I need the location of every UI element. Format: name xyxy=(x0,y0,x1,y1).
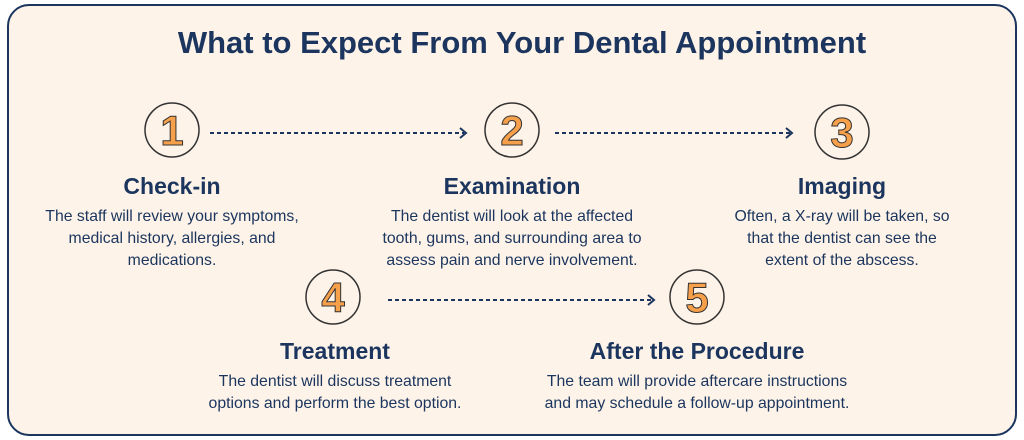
arrow 4 to 5 xyxy=(388,295,654,305)
arrow 2 to 3 xyxy=(555,128,792,138)
step 3 text: extent of the abscess. xyxy=(765,252,919,269)
step 1 text: medical history, allergies, and xyxy=(69,230,275,247)
icon: number 2 xyxy=(485,103,539,157)
step 5 text: and may schedule a follow-up appointment. xyxy=(545,395,849,412)
step 3 text: Imaging xyxy=(798,173,886,199)
step 2 text: assess pain and nerve involvement. xyxy=(386,252,638,269)
step 1 text xyxy=(45,173,299,269)
step 3 text: that the dentist can see the xyxy=(747,230,937,247)
icon: number 3: 3 xyxy=(830,109,854,156)
step 4 text: options and perform the best option. xyxy=(209,395,461,412)
step 2 text xyxy=(382,173,642,269)
icon: number 4: 4 xyxy=(321,274,345,321)
step 2 text: tooth, gums, and surrounding area to xyxy=(382,230,642,247)
step 1 text: medications. xyxy=(128,252,216,269)
step 1 text: Check-in xyxy=(123,173,221,199)
step 4 text xyxy=(209,338,461,412)
step 5 text xyxy=(545,338,849,412)
icon: number 5 xyxy=(670,270,724,324)
step 2 text: Examination xyxy=(444,173,580,199)
step 3 text: Often, a X-ray will be taken, so xyxy=(734,208,950,225)
arrow 1 to 2 xyxy=(210,128,466,138)
step 4 text: Treatment xyxy=(280,338,390,364)
step 4 text: The dentist will discuss treatment xyxy=(219,373,451,390)
step 2 text: The dentist will look at the affected xyxy=(391,208,633,225)
step 3 text xyxy=(734,173,950,269)
step 5 text: After the Procedure xyxy=(590,338,804,364)
icon: number 5: 5 xyxy=(685,274,709,321)
icon: number 4 xyxy=(306,270,360,324)
icon: number 3 xyxy=(815,105,869,159)
icon: number 1 xyxy=(145,103,199,157)
step 1 text: The staff will review your symptoms, xyxy=(45,208,299,225)
icon: number 2: 2 xyxy=(500,107,524,154)
icon: number 1: 1 xyxy=(160,107,184,154)
step 5 text: The team will provide aftercare instructions xyxy=(547,373,847,390)
title: What to Expect From Your Dental Appointment xyxy=(178,25,866,60)
